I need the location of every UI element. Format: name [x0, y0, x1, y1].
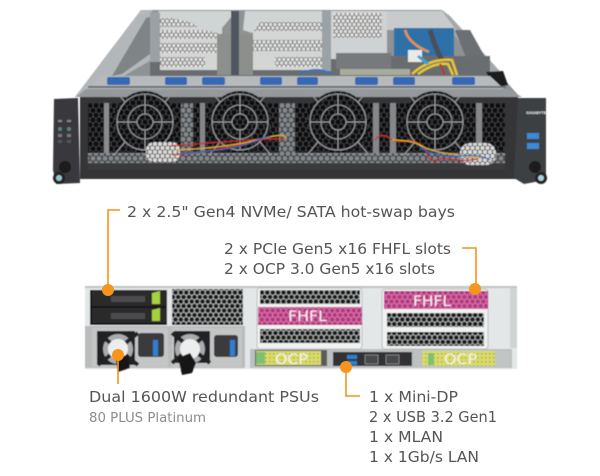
rear chassis [85, 286, 517, 369]
rear IO ports [333, 352, 412, 366]
right front ear with USB ports [514, 98, 547, 184]
callout: PCIe and OCP slots: 2 x PCIe Gen5 x16 FHFL slots [224, 240, 451, 258]
rear power bay [331, 11, 410, 75]
PSU 2 [172, 328, 242, 375]
drive bays [90, 290, 167, 325]
callout: rear IO [340, 361, 497, 466]
fans [114, 89, 466, 155]
PSU 1 [92, 328, 168, 372]
left front ear with LEDs [53, 98, 80, 184]
callout: power supplies [89, 349, 319, 426]
callout: drive bays: 2 x 2.5" Gen4 NVMe/ SATA hot-swap bays [127, 203, 455, 221]
OCP right [422, 351, 510, 368]
right front ear with USB ports: GIGABYTE [526, 111, 547, 115]
rear vent [172, 289, 243, 325]
front top lip [76, 89, 522, 97]
label: OCP left: OCP [275, 352, 308, 368]
callout: power supplies: Dual 1600W redundant PSUs [89, 388, 319, 406]
OCP left [255, 350, 327, 368]
front server photo [53, 10, 547, 184]
callout: rear IO: 1 x MLAN [369, 428, 443, 446]
callout: rear IO: 2 x USB 3.2 Gen1 [369, 408, 497, 426]
label: FHFL left: FHFL [288, 309, 327, 325]
callout: drive bays [102, 203, 455, 296]
callout: rear IO: 1 x 1Gb/s LAN [369, 448, 479, 466]
fan bar with blue handles [88, 76, 506, 90]
PCB and cables [300, 11, 508, 88]
chassis interior [75, 10, 520, 97]
label: FHFL right: FHFL [413, 294, 451, 310]
front grill [80, 97, 518, 179]
label: OCP right: OCP [444, 352, 477, 368]
rear server photo [85, 286, 517, 375]
middle riser cage [243, 11, 331, 71]
callout: power supplies: 80 PLUS Platinum [89, 411, 206, 426]
callout: PCIe and OCP slots [224, 240, 481, 295]
callout: rear IO: 1 x Mini-DP [369, 388, 458, 406]
PCIe cage 1 [257, 288, 362, 349]
bundled wires [146, 135, 496, 165]
PCIe cage 2 [382, 289, 488, 349]
left riser cage [150, 11, 253, 75]
callout: PCIe and OCP slots: 2 x OCP 3.0 Gen5 x16 slots [224, 260, 435, 278]
